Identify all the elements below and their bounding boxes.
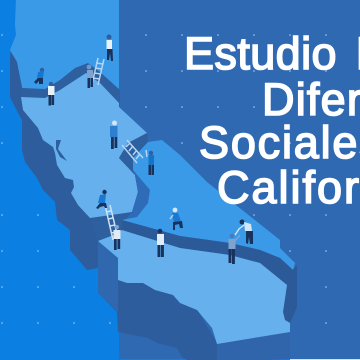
person arm raised <box>146 150 154 175</box>
central land <box>21 73 147 218</box>
person by ladder south <box>114 225 120 250</box>
person kneeling south <box>96 190 107 209</box>
ladder south <box>105 205 118 240</box>
southern crack band and eastern ridge <box>122 220 297 323</box>
dot grid <box>1 34 327 324</box>
upper land <box>10 0 119 96</box>
person helping east <box>235 220 253 244</box>
northern crack band <box>21 63 120 107</box>
person kneeling north <box>34 68 44 84</box>
person crouching east <box>170 208 183 230</box>
ladder north <box>92 58 104 85</box>
person by ladder north <box>87 65 93 88</box>
right background panel <box>119 0 360 359</box>
southern wall <box>217 332 290 360</box>
ladder central <box>122 140 143 163</box>
cliff side of the state <box>10 52 217 360</box>
shadow figure <box>56 140 67 161</box>
central crack band <box>90 133 150 241</box>
southern land <box>98 230 290 344</box>
person standing north <box>106 34 113 61</box>
central crack lighter face <box>124 170 150 221</box>
eastern land <box>122 140 295 270</box>
title <box>184 28 360 213</box>
south-west wall face <box>98 241 118 312</box>
person blue shirt centre <box>110 120 118 149</box>
person white shirt south <box>157 229 164 257</box>
person white shirt <box>48 82 54 106</box>
person reaching up east <box>228 234 240 264</box>
bottom edge line <box>290 359 360 360</box>
